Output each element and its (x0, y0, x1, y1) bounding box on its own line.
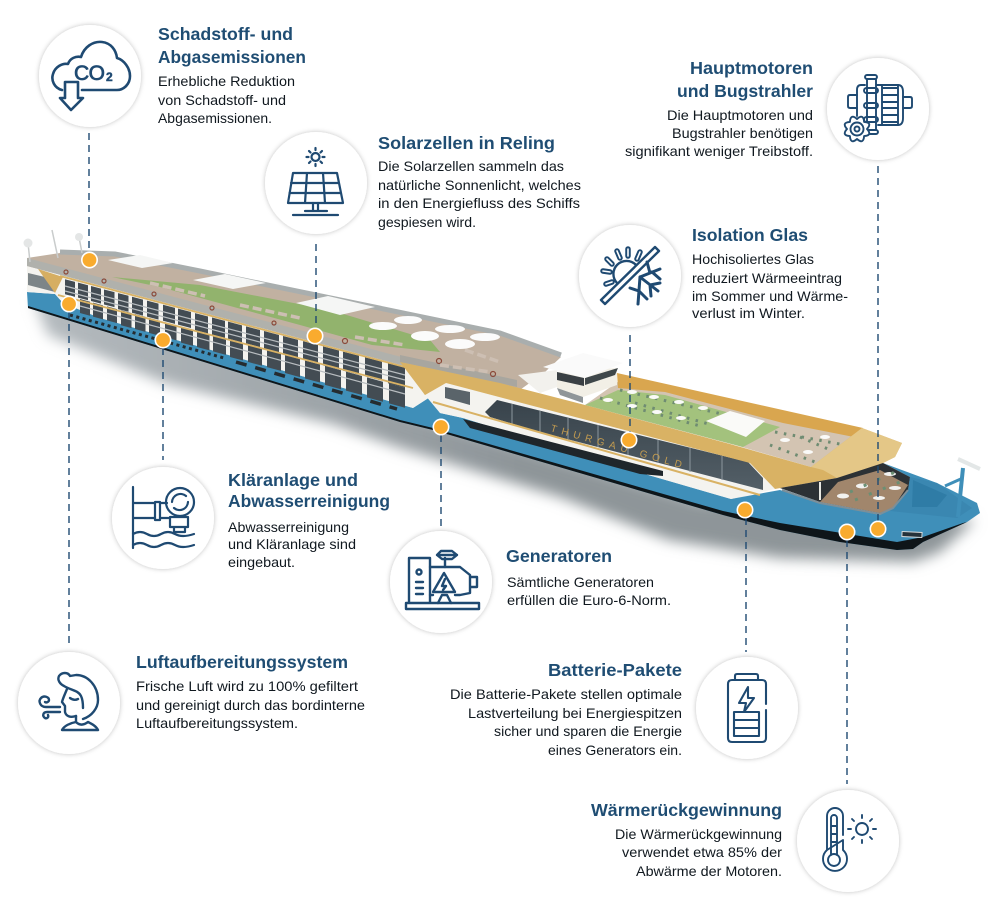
text block (450, 686, 682, 758)
icon: motor with gear (845, 75, 912, 141)
upper saloon windows (485, 400, 763, 490)
dashed leader lines (69, 133, 878, 784)
text block (507, 574, 671, 608)
aft superstructure (27, 265, 445, 408)
text block: eingebaut. (228, 554, 295, 570)
keel (28, 306, 967, 550)
text block: Frische Luft wird zu 100% gefiltert (136, 678, 358, 694)
text block: von Schadstoff- und (158, 92, 286, 108)
bow deck (880, 477, 972, 518)
panel: Generatoren (390, 531, 671, 633)
lobby glass (445, 387, 470, 405)
icon: person breathing (40, 673, 98, 730)
forward superstructure (425, 383, 775, 499)
icon: generator (406, 551, 479, 609)
ship illustration (24, 230, 980, 562)
gold stripes (58, 276, 413, 388)
icon: CO2 cloud: CO (74, 62, 105, 85)
orange markers (61, 252, 886, 540)
bridge (518, 353, 623, 403)
icon: sewage pipe (133, 487, 194, 548)
forward sun deck floor (585, 381, 865, 467)
panel: Luftaufbereitungssystem (18, 652, 365, 754)
panel: Kläranlage und Abwasserreinigung (112, 467, 390, 570)
hull (27, 292, 980, 550)
heading: Generatoren (506, 546, 612, 566)
forward near railing (400, 355, 517, 387)
panel: Wärmerückgewinnung (591, 790, 899, 892)
heading: Isolation Glas (692, 225, 808, 245)
text block: eines Generators ein. (548, 742, 682, 758)
heading (228, 470, 390, 511)
lower cabin windows (80, 299, 405, 408)
upper cabin windows (65, 279, 405, 388)
text block (378, 158, 581, 230)
heading: Kläranlage und (228, 470, 358, 490)
text block: natürliche Sonnenlicht, welches (378, 177, 581, 193)
saloon window mullions (512, 404, 722, 480)
text block: erfüllen die Euro-6-Norm. (507, 592, 671, 608)
portholes (70, 315, 397, 409)
stern windows (28, 273, 55, 292)
heading: Schadstoff- und (158, 24, 293, 44)
water reflection (34, 300, 975, 562)
heading: Abgasemissionen (158, 47, 306, 67)
icon: thermometer and sun (823, 808, 876, 871)
text block: Die Batterie-Pakete stellen optimale (450, 686, 682, 702)
icon: solar panel (288, 148, 343, 215)
gold sheer line (433, 402, 760, 495)
heading (158, 24, 306, 67)
antennas (24, 230, 83, 262)
text block: sicher und sparen die Energie (494, 723, 682, 739)
text block: Die Solarzellen sammeln das (378, 158, 564, 174)
text block: Die Hauptmotoren und (667, 107, 813, 123)
green lawn (112, 277, 440, 352)
gold triangles (38, 269, 445, 395)
text block: Abwärme der Motoren. (636, 863, 782, 879)
panel: Batterie-Pakete (450, 657, 798, 759)
gold roof band (400, 362, 902, 489)
sun loungers (150, 283, 500, 372)
text block: Lastverteilung bei Energiespitzen (468, 705, 682, 721)
text block: Hochisoliertes Glas (692, 251, 814, 267)
text block: gespiesen wird. (378, 214, 476, 230)
text block: Sämtliche Generatoren (507, 574, 654, 590)
terrace chairs (600, 390, 845, 462)
life rings (64, 270, 496, 376)
text block (158, 73, 295, 126)
terrace tables (603, 390, 830, 454)
text block: und Kläranlage sind (228, 536, 356, 552)
text block (625, 107, 813, 159)
bow hawse plate (902, 531, 922, 538)
heading: Hauptmotoren (690, 58, 813, 78)
text block: Erhebliche Reduktion (158, 73, 295, 89)
text block (692, 251, 848, 321)
awnings (108, 255, 375, 315)
text block: verwendet etwa 85% der (622, 844, 782, 860)
text block: und gereinigt durch das bordinterne (136, 697, 365, 713)
lower saloon windows (463, 419, 663, 476)
text block: reduziert Wärmeeintrag (692, 270, 842, 286)
text block: verlust im Winter. (692, 305, 805, 321)
panel: Hauptmotoren und Bugstrahler (625, 58, 929, 160)
text block: Abgasemissionen. (158, 110, 272, 126)
far railing (60, 252, 561, 355)
icon: battery (728, 674, 766, 742)
heading: Luftaufbereitungssystem (136, 652, 348, 672)
heading: Batterie-Pakete (548, 660, 682, 680)
icon: CO2 cloud (52, 42, 130, 110)
bow mast with radar (945, 459, 980, 517)
umbrellas (369, 316, 500, 349)
panel: Schadstoff- und Abgasemissionen (39, 24, 306, 127)
text block (615, 826, 782, 879)
window highlights (65, 286, 405, 394)
near railing (27, 258, 405, 366)
text block: Abwasserreinigung (228, 519, 349, 535)
text block: Bugstrahler benötigen (672, 125, 813, 141)
heading (677, 58, 813, 101)
heading: Abwasserreinigung (228, 491, 390, 511)
text block (136, 678, 365, 731)
gold canopy highlight (811, 428, 902, 478)
heading: und Bugstrahler (677, 81, 813, 101)
heading: Solarzellen in Reling (378, 133, 555, 153)
panel: Solarzellen in Reling (265, 132, 581, 234)
text block: Die Wärmerückgewinnung (615, 826, 782, 842)
icon: sun and snowflake (601, 247, 660, 304)
icon: CO2 cloud: 2 (106, 70, 113, 84)
ship name: THURGAU GOLD (549, 423, 683, 471)
aft deck (27, 253, 561, 392)
bow terrace (780, 463, 910, 514)
heading: Wärmerückgewinnung (591, 800, 782, 820)
text block: in den Energiefluss des Schiffs (378, 195, 580, 211)
text block (228, 519, 356, 570)
text block: Luftaufbereitungssystem. (136, 715, 298, 731)
forward green lawn (585, 390, 780, 447)
panel: Isolation Glas (579, 225, 848, 327)
forward terrace wall (617, 373, 863, 437)
text block: im Sommer und Wärme- (692, 288, 848, 304)
text block: signifikant weniger Treibstoff. (625, 143, 813, 159)
